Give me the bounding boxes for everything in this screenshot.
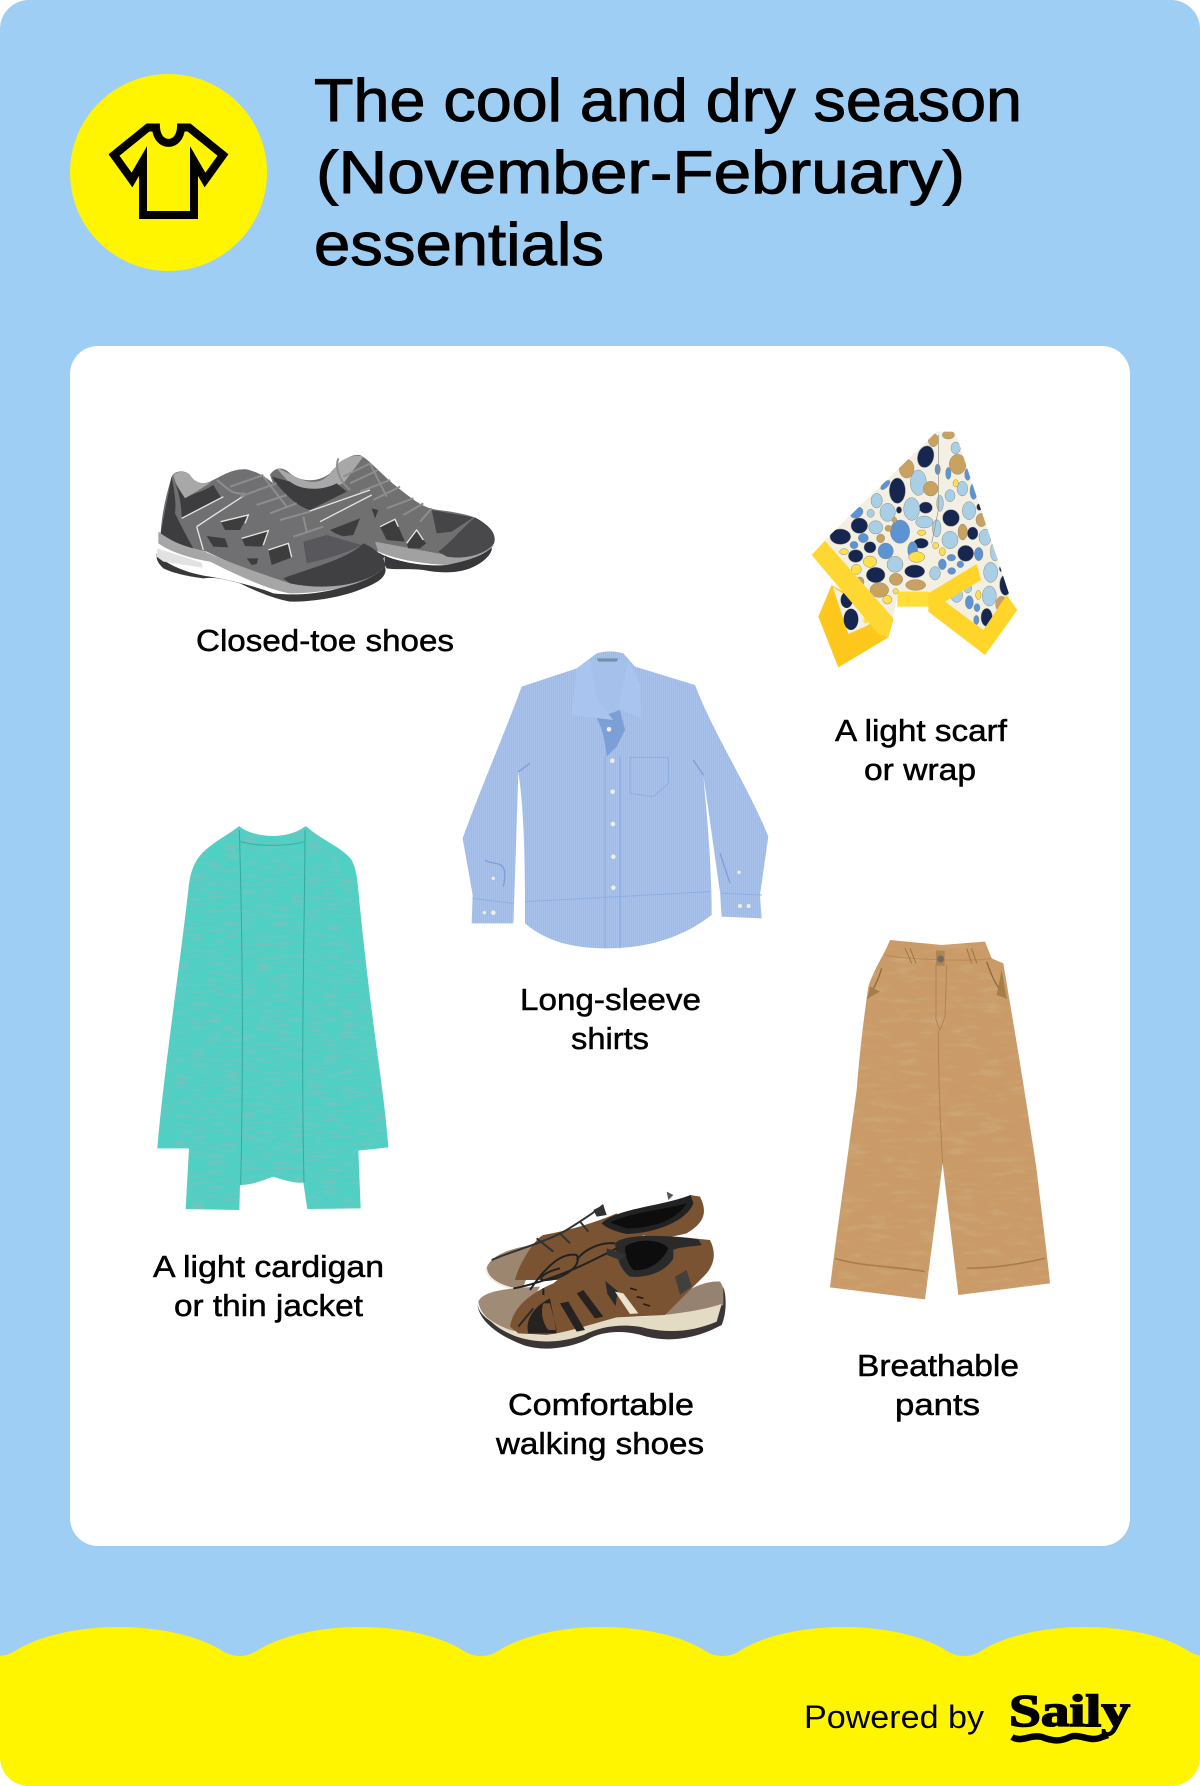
label: breathable pants: pants (895, 1387, 980, 1422)
photo: patterned scarf (812, 431, 1017, 667)
label: light cardigan: A light cardigan (153, 1249, 384, 1284)
label: light scarf (835, 713, 1007, 787)
title: The cool and dry season (314, 67, 1022, 134)
photo: blue shirt (463, 651, 768, 948)
powered by Saily credit (804, 1685, 1130, 1740)
item: light scarf (812, 431, 1017, 787)
title: essentials (314, 211, 604, 278)
item: breathable pants (830, 940, 1050, 1422)
item: light cardigan (153, 826, 388, 1323)
label: light scarf: or wrap (864, 752, 976, 787)
label: walking shoes: Comfortable (508, 1387, 694, 1422)
item: long-sleeve shirts (463, 651, 768, 1056)
label: long-sleeve shirts: Long-sleeve (520, 982, 701, 1017)
label: breathable pants: Breathable (857, 1348, 1019, 1383)
photo: brown sandals (477, 1192, 726, 1349)
photo: grey hiking shoes (157, 455, 495, 602)
label: light cardigan: or thin jacket (174, 1288, 363, 1323)
label: closed-toe shoes: Closed-toe shoes (196, 623, 454, 658)
label: walking shoes (495, 1387, 704, 1461)
panel: essentials items (70, 346, 1130, 1546)
photo: tan wide-leg pants (830, 940, 1050, 1299)
label: light scarf: A light scarf (835, 713, 1007, 748)
title: (November-February) (316, 139, 965, 206)
logo: Saily wordmark: Saily (1009, 1685, 1130, 1736)
footer wave band (0, 1627, 1200, 1786)
photo: teal cardigan (157, 826, 388, 1210)
item: walking shoes (477, 1192, 726, 1461)
label: light cardigan (153, 1249, 384, 1323)
label: long-sleeve shirts (520, 982, 701, 1056)
label: long-sleeve shirts: shirts (571, 1021, 649, 1056)
icon: yellow circle with t-shirt (70, 74, 267, 271)
label: walking shoes: walking shoes (495, 1426, 704, 1461)
text: powered by: Powered by (804, 1699, 984, 1735)
label: breathable pants (857, 1348, 1019, 1422)
item: closed-toe shoes (157, 455, 495, 658)
title (314, 67, 1022, 278)
